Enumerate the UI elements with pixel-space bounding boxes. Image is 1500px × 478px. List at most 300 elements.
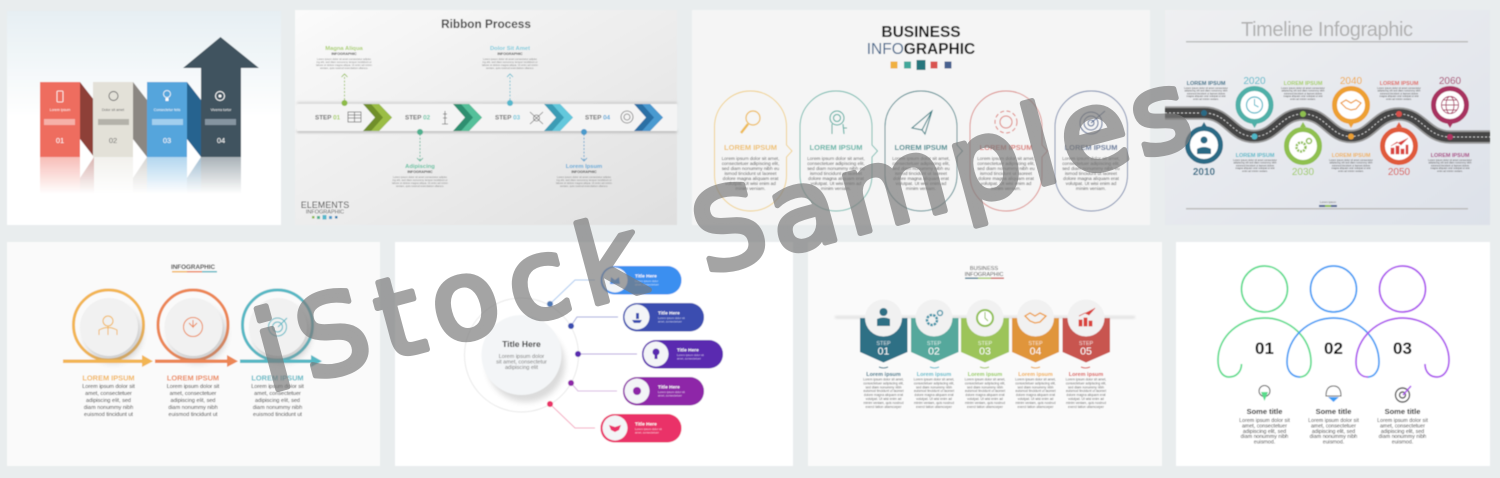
column 1: Lorem ipsum dolor sit — [1239, 418, 1290, 424]
card 4: dolore magna aliquam erat — [978, 176, 1035, 181]
pill 4: Title Here — [658, 384, 680, 390]
step 05: consectetuer adipiscing elit, — [1066, 381, 1106, 385]
callout: Dolor Sit Amet: ing elit, sed diam nonummy tempor incididunt ut — [483, 60, 538, 64]
ribbon 01: Lorem ipsum — [50, 108, 70, 112]
card 3: sed diam nonummy nibh eu — [892, 166, 950, 171]
ribbon 03: Consectetur felis — [154, 108, 181, 112]
step 01: consectetuer adipiscing elit, — [863, 381, 904, 385]
timeline text blocks: euismod tincidunt ut laoreet dolore — [1236, 164, 1275, 167]
step 01: 01 — [878, 346, 889, 358]
step 3: amet, consectetuer — [254, 391, 301, 397]
card 3: volutpat. Ut wisi enim ad — [896, 181, 947, 186]
step 01 — [860, 300, 908, 409]
callout: Magna Aliqua: veniam, quis nostrud exercitation ullamco. — [320, 66, 368, 70]
card 2: volutpat. Ut wisi enim ad — [811, 181, 862, 186]
step 2: adipiscing elit, sed — [171, 398, 215, 404]
callout: Dolor Sit Amet — [482, 46, 538, 106]
step 01: volutpat. Ut wisi enim ad — [866, 397, 902, 401]
step 05 — [1062, 300, 1110, 409]
pill 2: amet, consectetuer — [658, 320, 682, 324]
timeline text blocks: LOREM IPSUM — [1187, 81, 1226, 87]
panel: three circle process — [7, 242, 380, 466]
step 04: dolore magna aliquam erat — [1016, 393, 1055, 397]
step 04: volutpat. Ut wisi enim ad — [1018, 397, 1054, 401]
card 1: consectetuer adipiscing elit, — [722, 161, 779, 166]
step icons — [348, 111, 633, 124]
column 1: adipiscing elit, sed — [1243, 429, 1286, 435]
callout: Adipiscing — [392, 129, 448, 188]
ribbon 02 — [93, 82, 133, 157]
card 5: dolore magna aliquam erat — [1063, 176, 1120, 181]
timeline text blocks: enim ad minim veniam. — [1193, 98, 1219, 101]
card 1: sed diam nonummy nibh eu — [722, 166, 780, 171]
step 01: sed diam nonummy nibh — [866, 385, 902, 389]
timeline text blocks: Lorem ipsum dolor sit amet consectetur — [1377, 87, 1421, 90]
step 03: STEP — [978, 341, 993, 347]
step 04: STEP — [1028, 341, 1043, 347]
step 1: Lorem ipsum dolor sit — [82, 384, 135, 390]
callout: Dolor Sit Amet: Lorem ipsum dolor sit amet consectetur adipisc — [483, 57, 538, 61]
column 3: Some title — [1385, 407, 1420, 416]
card 5: minim veniam. — [1076, 186, 1106, 191]
timeline text blocks: Lorem ipsum dolor sit amet consectetur — [1281, 87, 1325, 90]
heading: BUSINESS — [970, 266, 998, 272]
pin 2040 — [1334, 76, 1368, 128]
timeline text blocks: magna aliquam erat volutpat ut wisi — [1379, 95, 1419, 98]
timeline text blocks: LOREM IPSUM — [1236, 153, 1275, 159]
callout: Lorem Ipsum — [556, 129, 612, 188]
column 2: Lorem ipsum dolor sit — [1308, 418, 1359, 424]
step 02: exerci tation ullamcorper — [916, 405, 953, 409]
logo: elements infographic: ELEMENTS — [301, 200, 349, 210]
timeline text blocks: LOREM IPSUM — [1332, 153, 1371, 159]
step 01: exerci tation ullamcorper — [866, 405, 902, 409]
central circle: Lorem ipsum dolor — [499, 354, 544, 360]
step 02 — [911, 300, 958, 409]
timeline text blocks: adipiscing elit sed diam nonummy nibh — [1282, 90, 1325, 93]
callout: Lorem Ipsum: INFOGRAPHIC — [571, 170, 597, 174]
numbers: 02 — [1324, 339, 1343, 358]
card 4: consectetuer adipiscing elit, — [977, 161, 1035, 166]
callout: Magna Aliqua: INFOGRAPHIC — [331, 52, 357, 56]
column 2: adipiscing elit, sed — [1312, 429, 1355, 435]
ribbon 03 — [147, 82, 187, 157]
step 05: sed diam nonummy nibh — [1068, 385, 1104, 389]
step 05: exerci tation ullamcorper — [1068, 405, 1105, 409]
callout: Magna Aliqua: Lorem ipsum dolor sit amet consectetur adipisc — [317, 57, 372, 61]
colour swatches — [890, 60, 952, 70]
timeline text blocks: adipiscing elit sed diam nonummy nibh — [1185, 90, 1228, 93]
card 1: dolore magna aliquam erat — [723, 176, 779, 181]
card 4 — [970, 91, 1048, 211]
heading: INFOGRAPHIC — [867, 41, 975, 58]
step 02: dolore magna aliquam erat — [914, 393, 954, 397]
step 01: Lorem ipsum — [866, 372, 901, 378]
card 1: minim veniam. — [735, 186, 766, 191]
ribbon 02: 02 — [109, 136, 117, 145]
step 04: 04 — [1030, 346, 1041, 358]
step 3 — [240, 290, 322, 418]
step 2: diam nonummy nibh — [168, 405, 218, 411]
watermark: iStock — [242, 188, 668, 417]
step 01: STEP — [876, 341, 891, 347]
column 2: Some title — [1316, 407, 1351, 416]
callout: Adipiscing: Lorem ipsum dolor sit amet consectetur adipisc — [393, 175, 448, 179]
column 3: Lorem ipsum dolor sit — [1377, 418, 1428, 424]
column 3: euismod. — [1392, 440, 1413, 446]
card 2: consectetuer adipiscing elit, — [807, 161, 865, 166]
timeline text blocks: magna aliquam erat volutpat ut wisi — [1430, 167, 1470, 170]
step 03: sed diam nonummy nibh — [967, 385, 1003, 389]
heading — [965, 266, 1004, 279]
panel: timeline infographic — [1165, 10, 1490, 225]
pin 2020: 2020 — [1243, 76, 1266, 87]
step 04 — [1012, 300, 1059, 409]
central circle: sit amet, consectetur — [496, 360, 547, 366]
pin 2010: 2010 — [1193, 167, 1216, 178]
pill 5 — [600, 414, 682, 442]
card 5: volutpat. Ut wisi enim ad — [1066, 181, 1117, 186]
timeline text blocks: LOREM IPSUM — [1284, 81, 1323, 87]
step 1: amet, consectetuer — [85, 391, 132, 397]
card 1: volutpat. Ut wisi enim ad — [725, 181, 776, 186]
step 05: 05 — [1080, 346, 1092, 358]
step 02: Lorem ipsum dolor sit amet, — [914, 378, 954, 382]
card 1: ismod tincidunt ut laoreet — [724, 171, 777, 176]
column 1: amet, consectetuer — [1242, 424, 1287, 430]
card 5 — [1055, 91, 1128, 211]
step labels: STEP 01 — [315, 114, 341, 122]
ribbon band — [297, 102, 677, 132]
panel: 3D arrow ribbons — [7, 11, 281, 225]
reflection — [38, 157, 244, 194]
callout: Magna Aliqua — [316, 46, 372, 106]
step 03: euismod tincidunt ut laoreet — [965, 389, 1005, 393]
road markers — [1201, 110, 1453, 140]
step 04: Lorem ipsum — [1018, 372, 1053, 378]
step 1 — [63, 290, 153, 418]
step 03: Lorem ipsum — [968, 372, 1002, 378]
step 03 — [961, 300, 1009, 409]
step 03: minim veniam, quis nostrud — [965, 401, 1005, 405]
pill 4 — [623, 377, 704, 406]
pill 2: Lorem ipsum dolor sit — [658, 316, 685, 320]
pin 2010 — [1188, 122, 1220, 178]
step 02: euismod tincidunt ut laoreet — [914, 389, 954, 393]
step 02: consectetuer adipiscing elit, — [914, 381, 954, 385]
timeline text blocks: LOREM IPSUM — [1380, 81, 1419, 87]
pin 2060 — [1434, 76, 1466, 128]
callout: Adipiscing: INFOGRAPHIC — [407, 170, 433, 174]
column 3: diam nonummy nibh — [1379, 434, 1426, 440]
step 04: euismod tincidunt ut laoreet — [1015, 389, 1056, 393]
card 4: minim veniam. — [991, 186, 1021, 191]
card 3: Lorem ipsum dolor sit amet, — [892, 156, 950, 161]
timeline text blocks: euismod tincidunt ut laoreet dolore — [1431, 164, 1470, 167]
callout: Lorem Ipsum: veniam, quis nostrud exercitation ullamco. — [560, 184, 608, 188]
callout: Lorem Ipsum: Lorem ipsum dolor sit amet consectetur adipisc — [557, 175, 612, 179]
step 01: Lorem ipsum dolor sit amet, — [863, 378, 904, 382]
column 1: Some title — [1247, 407, 1282, 416]
card 3: LOREM IPSUM — [895, 143, 947, 152]
panel: radial title list — [395, 242, 793, 466]
card 1: LOREM IPSUM — [724, 143, 777, 152]
step 02: minim veniam, quis nostrud — [914, 401, 954, 405]
step 2: LOREM IPSUM — [167, 374, 219, 382]
step 1: LOREM IPSUM — [82, 374, 135, 382]
step 05: minim veniam, quis nostrud — [1066, 401, 1106, 405]
pill 2 — [623, 303, 704, 332]
step 02: volutpat. Ut wisi enim ad — [916, 397, 952, 401]
step 04: exerci tation ullamcorper — [1018, 405, 1054, 409]
card 3: minim veniam. — [906, 186, 936, 191]
callout: Adipiscing: ing elit, sed diam nonummy tempor incididunt ut — [393, 178, 448, 182]
step 02: Lorem ipsum — [917, 372, 951, 378]
card 3: ismod tincidunt ut laoreet — [895, 171, 948, 176]
column 3: adipiscing elit, sed — [1381, 429, 1424, 435]
ribbon 02: Dolor sit amet — [102, 108, 124, 112]
callout: Magna Aliqua: Magna Aliqua — [325, 46, 364, 52]
winding road — [1165, 113, 1490, 137]
callout: Adipiscing: Adipiscing — [405, 164, 435, 170]
pill 3: amet, consectetuer — [677, 356, 701, 360]
step 05: dolore magna aliquam erat — [1066, 393, 1106, 397]
card 5: sed diam nonummy nibh eu — [1062, 166, 1120, 171]
ribbon 04 arrow — [183, 37, 259, 157]
card 1: Lorem ipsum dolor sit amet, — [722, 156, 779, 161]
numbers: 01 — [1255, 339, 1274, 358]
pill 3: Title Here — [677, 348, 699, 354]
timeline text blocks: enim ad minim veniam. — [1290, 98, 1316, 101]
step 03: dolore magna aliquam erat — [965, 393, 1005, 397]
shelf shadow — [835, 316, 1135, 318]
pill 4: amet, consectetuer — [658, 394, 682, 398]
timeline text blocks: Lorem ipsum dolor sit amet consectetur — [1329, 159, 1373, 162]
pill 5: Lorem ipsum dolor sit — [635, 427, 662, 431]
pill 5: amet, consectetuer — [635, 430, 659, 434]
step 3: diam nonummy nibh — [253, 405, 302, 411]
card 2: dolore magna aliquam erat — [808, 176, 865, 181]
card 2 — [800, 91, 878, 211]
legend: Lorem ipsum — [1320, 200, 1337, 204]
step 04: consectetuer adipiscing elit, — [1015, 381, 1056, 385]
timeline text blocks — [1184, 81, 1472, 173]
step 03: exerci tation ullamcorper — [967, 405, 1004, 409]
step 02: sed diam nonummy nibh — [916, 385, 952, 389]
card 4: sed diam nonummy nibh eu — [977, 166, 1035, 171]
step 04: sed diam nonummy nibh — [1018, 385, 1054, 389]
card 2: LOREM IPSUM — [810, 143, 862, 152]
numbers — [1255, 339, 1412, 358]
timeline text blocks: LOREM IPSUM — [1431, 153, 1470, 159]
callout: Adipiscing: labore et dolore magna aliqua. Ut enim ad minim — [392, 181, 448, 185]
step 2: Lorem ipsum dolor sit — [167, 384, 220, 390]
step 04: Lorem ipsum dolor sit amet, — [1015, 378, 1056, 382]
card 5: LOREM IPSUM — [1065, 143, 1117, 152]
card 3: consectetuer adipiscing elit, — [892, 161, 950, 166]
heading: BUSINESS — [881, 24, 961, 41]
timeline text blocks: Lorem ipsum dolor sit amet consectetur — [1233, 159, 1277, 162]
heading — [867, 24, 975, 58]
timeline text blocks: magna aliquam erat volutpat ut wisi — [1283, 95, 1323, 98]
callout: Magna Aliqua: labore et dolore magna aliqua. Ut enim ad minim — [316, 63, 372, 67]
step 05: Lorem ipsum — [1069, 372, 1103, 378]
timeline text blocks: euismod tincidunt ut laoreet dolore — [1284, 92, 1323, 95]
heading: Timeline Infographic — [1241, 19, 1413, 41]
column 2: diam nonummy nibh — [1310, 434, 1357, 440]
chevron 2 — [453, 104, 482, 131]
panel: five steps — [808, 242, 1162, 466]
timeline text blocks: euismod tincidunt ut laoreet dolore — [1380, 92, 1419, 95]
callout: Magna Aliqua: ing elit, sed diam nonummy tempor incididunt ut — [317, 60, 372, 64]
step 2: amet, consectetuer — [170, 391, 217, 397]
step 01: minim veniam, quis nostrud — [863, 401, 904, 405]
heading: INFOGRAPHIC — [965, 272, 1003, 278]
card 3 — [885, 91, 962, 211]
step 04: minim veniam, quis nostrud — [1015, 401, 1056, 405]
step 05: Lorem ipsum dolor sit amet, — [1066, 378, 1106, 382]
ribbon 04 arrow: 04 — [217, 136, 225, 145]
step 03: volutpat. Ut wisi enim ad — [967, 397, 1003, 401]
panel: ribbon process — [295, 10, 677, 225]
column 2 — [1308, 386, 1359, 446]
logo: elements infographic — [301, 200, 349, 220]
pill 3 — [642, 340, 723, 368]
timeline text blocks: Lorem ipsum dolor sit amet consectetur — [1184, 87, 1228, 90]
heading: INFOGRAPHIC — [171, 264, 215, 271]
step 3: LOREM IPSUM — [251, 374, 304, 382]
step 3: adipiscing elit, sed — [255, 398, 300, 404]
card 4: volutpat. Ut wisi enim ad — [981, 181, 1032, 186]
ribbon 01 — [40, 82, 80, 157]
timeline text blocks: enim ad minim veniam. — [1437, 170, 1463, 173]
step 03: consectetuer adipiscing elit, — [965, 381, 1005, 385]
step 02: 02 — [928, 346, 940, 358]
step 03: Lorem ipsum dolor sit amet, — [965, 378, 1005, 382]
card 2: sed diam nonummy nibh eu — [807, 166, 865, 171]
pill 4: Lorem ipsum dolor sit — [658, 390, 685, 394]
timeline text blocks: adipiscing elit sed diam nonummy nibh — [1378, 90, 1421, 93]
step 01: euismod tincidunt ut laoreet — [863, 389, 904, 393]
callout: Lorem Ipsum: labore et dolore magna aliqua. Ut enim ad minim — [556, 181, 612, 185]
chevron 1 — [363, 104, 392, 131]
pin 2050 — [1382, 122, 1416, 178]
logo: elements infographic: INFOGRAPHIC — [306, 210, 344, 216]
callout: Lorem Ipsum: Lorem Ipsum — [566, 164, 602, 170]
central circle — [464, 298, 578, 412]
pin 2040: 2040 — [1340, 76, 1363, 87]
step 3: euismod tincidunt ut — [253, 412, 302, 418]
column 1: euismod. — [1254, 440, 1275, 446]
legend — [1319, 200, 1337, 207]
step 01: dolore magna aliquam erat — [864, 393, 903, 397]
pin 2020 — [1238, 76, 1271, 128]
pin 2050: 2050 — [1388, 167, 1411, 178]
panel: three person outline — [1176, 242, 1490, 466]
column 3 — [1377, 386, 1428, 446]
connector lines — [550, 280, 637, 428]
person outlines — [1218, 266, 1449, 377]
step 03: 03 — [979, 346, 991, 358]
pill 1: Lorem ipsum dolor — [635, 279, 658, 283]
watermark: Samples — [679, 43, 1210, 300]
pin 2030 — [1286, 122, 1320, 178]
step 2: euismod tincidunt ut — [169, 412, 218, 418]
ribbon 04 arrow: Viverra tortor — [211, 108, 232, 112]
card 5: consectetuer adipiscing elit, — [1062, 161, 1120, 166]
card 1 — [714, 91, 792, 211]
pill 2: Title Here — [658, 310, 680, 316]
timeline text blocks: magna aliquam erat volutpat ut wisi — [1186, 95, 1226, 98]
timeline text blocks: magna aliquam erat volutpat ut wisi — [1235, 167, 1275, 170]
ribbon 01: 01 — [56, 136, 64, 145]
callout: Dolor Sit Amet: labore et dolore magna aliqua. Ut enim ad minim — [482, 63, 538, 67]
timeline text blocks: adipiscing elit sed diam nonummy nibh — [1234, 162, 1277, 165]
card 4: Lorem ipsum dolor sit amet, — [977, 156, 1035, 161]
timeline text blocks: enim ad minim veniam. — [1386, 98, 1412, 101]
card 3: dolore magna aliquam erat — [893, 176, 950, 181]
step 2 — [155, 290, 238, 418]
timeline text blocks: Lorem ipsum dolor sit amet consectetur — [1428, 159, 1472, 162]
connector dots — [547, 301, 581, 407]
card 4: LOREM IPSUM — [980, 143, 1032, 152]
column 2: euismod. — [1323, 440, 1344, 446]
numbers: 03 — [1393, 339, 1412, 358]
timeline text blocks: adipiscing elit sed diam nonummy nibh — [1429, 162, 1472, 165]
step 05: STEP — [1079, 341, 1094, 347]
step 05: euismod tincidunt ut laoreet — [1066, 389, 1106, 393]
timeline text blocks: enim ad minim veniam. — [1242, 170, 1268, 173]
chevron 3 — [544, 104, 573, 131]
chevron 4 — [634, 104, 663, 131]
column 3: amet, consectetuer — [1380, 424, 1425, 430]
pill 1: amet, consectetuer — [635, 282, 659, 286]
callout: Dolor Sit Amet: INFOGRAPHIC — [497, 52, 523, 56]
central circle: adipiscing elit — [505, 365, 538, 371]
column 2: amet, consectetuer — [1311, 424, 1356, 430]
card 2: minim veniam. — [821, 186, 851, 191]
column 1: diam nonummy nibh — [1241, 434, 1288, 440]
step labels: STEP 03 — [495, 114, 521, 122]
pin 2060: 2060 — [1439, 76, 1462, 87]
panel: business infographic — [692, 10, 1150, 225]
timeline text blocks: euismod tincidunt ut laoreet dolore — [1187, 92, 1226, 95]
callout: Dolor Sit Amet: Dolor Sit Amet — [490, 46, 530, 52]
pill 1: Title Here — [635, 274, 657, 280]
timeline text blocks: adipiscing elit sed diam nonummy nibh — [1330, 162, 1373, 165]
pin 2030: 2030 — [1292, 167, 1315, 178]
timeline text blocks: euismod tincidunt ut laoreet dolore — [1332, 164, 1371, 167]
callout: Lorem Ipsum: ing elit, sed diam nonummy tempor incididunt ut — [557, 178, 612, 182]
callout: Adipiscing: veniam, quis nostrud exercitation ullamco. — [396, 184, 444, 188]
column 1 — [1239, 386, 1290, 446]
pill 5: Title Here — [635, 422, 657, 428]
timeline text blocks: enim ad minim veniam. — [1338, 170, 1364, 173]
step 05: volutpat. Ut wisi enim ad — [1068, 397, 1104, 401]
card 4: ismod tincidunt ut laoreet — [980, 171, 1033, 176]
heading: Ribbon Process — [441, 17, 531, 31]
step labels: STEP 04 — [585, 114, 611, 122]
step 1: diam nonummy nibh — [84, 405, 133, 411]
step 1: euismod tincidunt ut — [84, 412, 133, 418]
card 2: ismod tincidunt ut laoreet — [810, 171, 863, 176]
central circle: Title Here — [502, 339, 541, 349]
step 1: adipiscing elit, sed — [86, 398, 131, 404]
step 02: STEP — [927, 341, 942, 347]
card 5: ismod tincidunt ut laoreet — [1065, 171, 1118, 176]
pill 3: Lorem ipsum dolor sit — [677, 353, 704, 357]
callout: Dolor Sit Amet: veniam, quis nostrud exercitation ullamco. — [486, 66, 534, 70]
